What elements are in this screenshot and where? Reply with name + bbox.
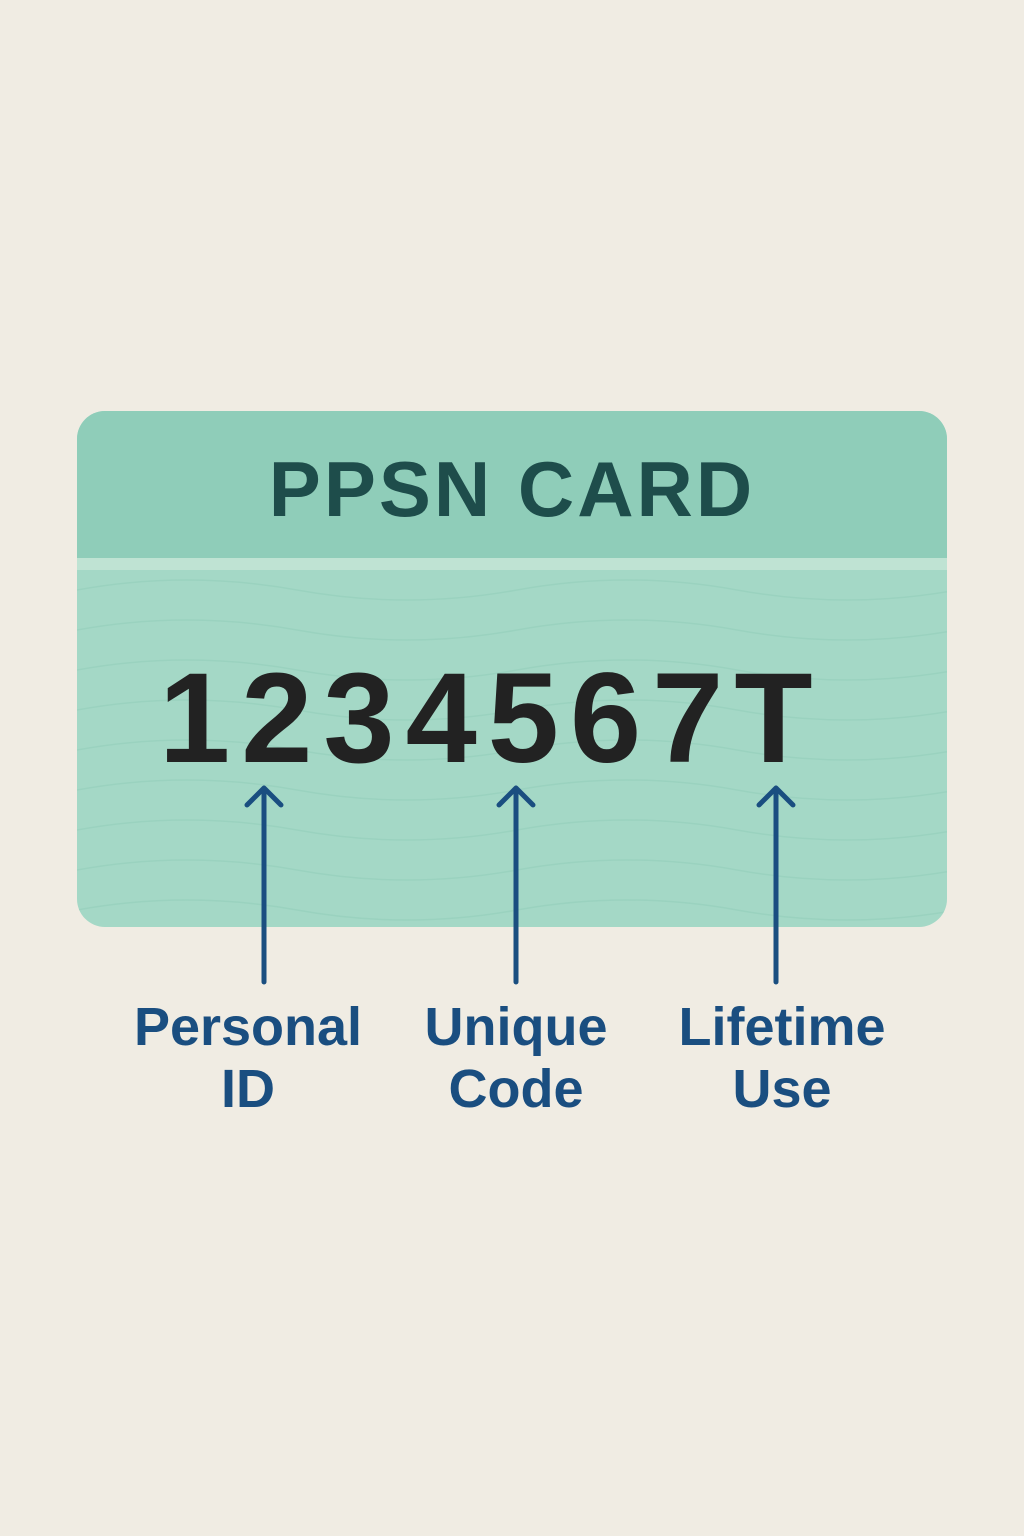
label: Personal ID: ID xyxy=(221,1059,275,1119)
arrow: unique code xyxy=(499,788,533,982)
label: Lifetime Use: Use xyxy=(732,1059,832,1119)
label: Unique Code: Unique xyxy=(424,997,608,1057)
label: Unique Code: Code xyxy=(448,1059,584,1119)
label: Personal ID: Personal xyxy=(134,997,362,1057)
label: Personal ID xyxy=(134,997,362,1119)
label: Unique Code xyxy=(424,997,608,1119)
card xyxy=(77,411,947,927)
PPSN number: 1234567T xyxy=(159,647,824,790)
card header band xyxy=(77,411,947,558)
label: Lifetime Use xyxy=(678,997,886,1119)
arrow: lifetime use xyxy=(759,788,793,982)
arrow: personal ID xyxy=(247,788,281,982)
title: PPSN CARD xyxy=(269,445,755,533)
label: Lifetime Use: Lifetime xyxy=(678,997,886,1057)
